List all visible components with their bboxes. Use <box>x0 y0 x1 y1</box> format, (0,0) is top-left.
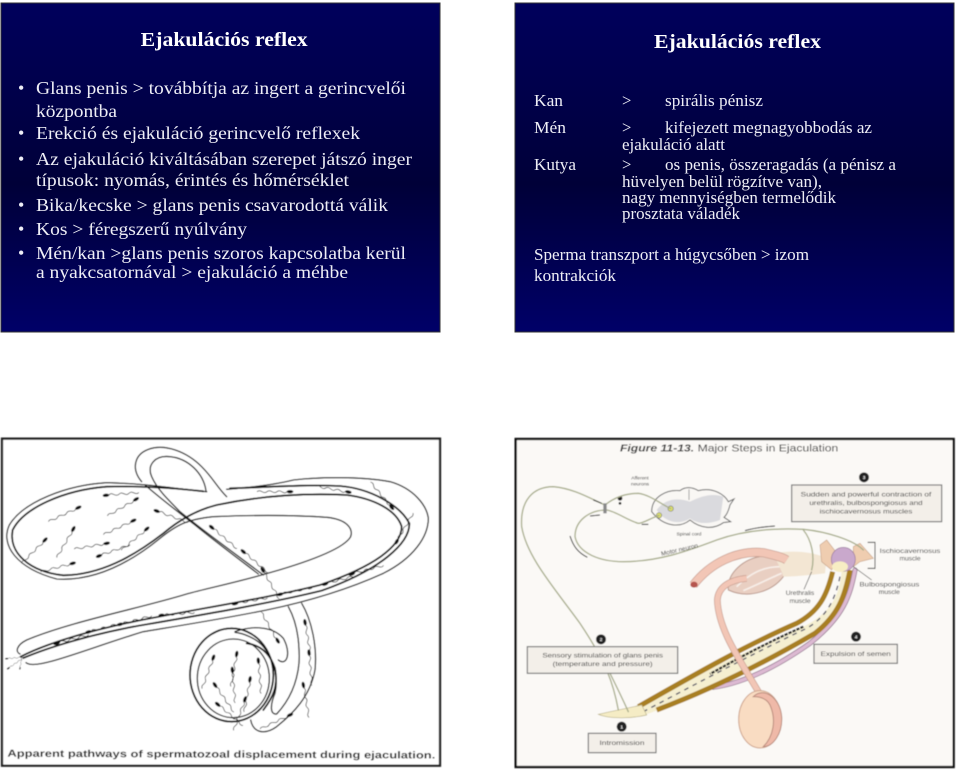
callout: step 4 expulsion of semen: Expulsion of semen <box>821 651 891 658</box>
callout: step 3 muscle contraction: ischiocavernosus muscles <box>820 508 913 515</box>
panel: left slide, reflex bullet list <box>1 3 440 332</box>
text block: sperm transport note <box>534 245 809 285</box>
callout: step 1 intromission: 1 <box>620 724 623 729</box>
callout: step 3 muscle contraction: urethralis, bulbospongiosus and <box>809 500 923 507</box>
labels: anatomy annotations <box>631 476 941 605</box>
text block: bullet list: • <box>18 195 24 215</box>
text block: species list: nagy mennyiségben termelődik <box>622 188 837 207</box>
illustration: pink outer sheath fill <box>713 570 855 687</box>
text block: bullet list: Glans penis > továbbítja az ingert a gerincvelői <box>36 78 406 98</box>
text block: bullet list: típusok: nyomás, érintés és hőmérséklet <box>36 170 349 190</box>
callout: step 2 sensory stimulation: (temperature and pressure) <box>553 661 653 668</box>
text block: bullet list: a nyakcsatornával > ejakuláció a méhbe <box>36 262 348 282</box>
heading: left slide title: Ejakulációs reflex <box>141 29 308 51</box>
heading: right slide title: Ejakulációs reflex <box>654 31 822 53</box>
text block: bullet list: • <box>18 219 24 239</box>
callout: step 2 sensory stimulation <box>527 634 678 673</box>
text block: bullet list: • <box>18 149 24 169</box>
text block: species list: Mén <box>534 118 566 137</box>
text block: bullet list: Kos > féregszerű nyúlvány <box>36 219 247 239</box>
labels: anatomy annotations: Afferent <box>631 476 649 482</box>
panel: right slide, species comparison <box>515 3 954 332</box>
text block: sperm transport note: kontrakciók <box>534 266 617 285</box>
callout: step 1 intromission: Intromission <box>599 740 645 747</box>
illustration: bladder <box>728 556 785 594</box>
panel: figure 11-13, major steps in ejaculation <box>516 439 954 767</box>
caption: spermatozoal displacement: Apparent pathways of spermatozoal displacement during ejaculation. <box>7 749 436 762</box>
callout: step 3 muscle contraction: Sudden and powerful contraction of <box>801 491 932 498</box>
text block: bullet list: központba <box>36 101 117 121</box>
illustration: ischiocavernosus and bulbospongiosus muscles <box>820 540 873 572</box>
labels: anatomy annotations: Motor neuron <box>661 542 699 558</box>
text block: species list <box>534 91 897 223</box>
labels: anatomy annotations: Bulbospongiosus <box>859 581 920 588</box>
text block: species list: ejakuláció alatt <box>622 135 725 154</box>
text block: species list: prosztata váladék <box>622 204 741 223</box>
labels: anatomy annotations: muscle <box>899 556 921 563</box>
text block: species list: kifejezett megnagyobbodás az <box>665 118 872 137</box>
callout: step 3 muscle contraction <box>792 472 942 522</box>
text block: bullet list <box>18 78 412 282</box>
illustration: vas deferens tubes <box>690 552 787 693</box>
text block: sperm transport note: Sperma transzport a húgycsőben > izom <box>534 245 809 264</box>
text block: species list: > <box>622 91 631 110</box>
illustration: testis <box>739 691 782 748</box>
illustration: spermatozoa in upper sac and ducts <box>5 481 415 731</box>
labels: anatomy annotations: muscle <box>879 589 900 596</box>
labels: anatomy annotations: Ischiocavernosus <box>880 548 941 555</box>
text block: bullet list: Mén/kan >glans penis szoros kapcsolatba kerül <box>36 243 406 263</box>
text block: species list: spirális pénisz <box>665 91 763 110</box>
text block: bullet list: • <box>18 123 24 143</box>
text block: species list: > <box>622 118 631 137</box>
illustration: pink outer sheath <box>713 570 855 687</box>
text block: species list: os penis, összeragadás (a pénisz a <box>665 155 897 174</box>
labels: anatomy annotations: muscle <box>789 598 811 605</box>
callout: step 4 expulsion of semen: 4 <box>855 634 858 639</box>
text block: bullet list: Bika/kecske > glans penis csavarodottá válik <box>36 195 388 215</box>
text block: bullet list: Az ejakuláció kiváltásában szerepet játszó inger <box>36 149 412 169</box>
illustration: afferent and motor nerve paths <box>522 487 863 712</box>
callout: step 4 expulsion of semen <box>814 632 897 663</box>
text block: bullet list: Erekció és ejakuláció gerincvelő reflexek <box>36 123 360 143</box>
labels: anatomy annotations: Spinal cord <box>677 532 702 538</box>
callout: step 3 muscle contraction: 3 <box>863 475 866 480</box>
illustration: prostate and urethralis <box>773 552 827 577</box>
text block: species list: > <box>622 155 631 174</box>
text block: bullet list: • <box>18 78 24 98</box>
labels: anatomy annotations: neurons <box>631 482 650 488</box>
illustration: testis with epididymis <box>190 628 288 722</box>
illustration: duct outlines <box>7 447 428 732</box>
illustration: penis shaft with urethra <box>598 570 850 718</box>
labels: anatomy annotations: Urethralis <box>786 590 815 597</box>
illustration: spinal cord cross-section <box>618 488 734 527</box>
callout: step 2 sensory stimulation: Sensory stimulation of glans penis <box>542 653 664 660</box>
text block: bullet list: • <box>18 243 24 263</box>
callout: step 2 sensory stimulation: 2 <box>600 637 603 642</box>
heading: figure title: Figure 11-13. Major Steps in Ejaculation <box>620 444 839 455</box>
text block: species list: hüvelyen belül rögzítve van), <box>622 172 822 191</box>
callout: step 1 intromission <box>588 722 656 753</box>
text block: species list: Kan <box>534 91 563 110</box>
panel: line drawing of spermatozoal pathways <box>2 439 440 766</box>
text block: species list: Kutya <box>534 155 577 174</box>
